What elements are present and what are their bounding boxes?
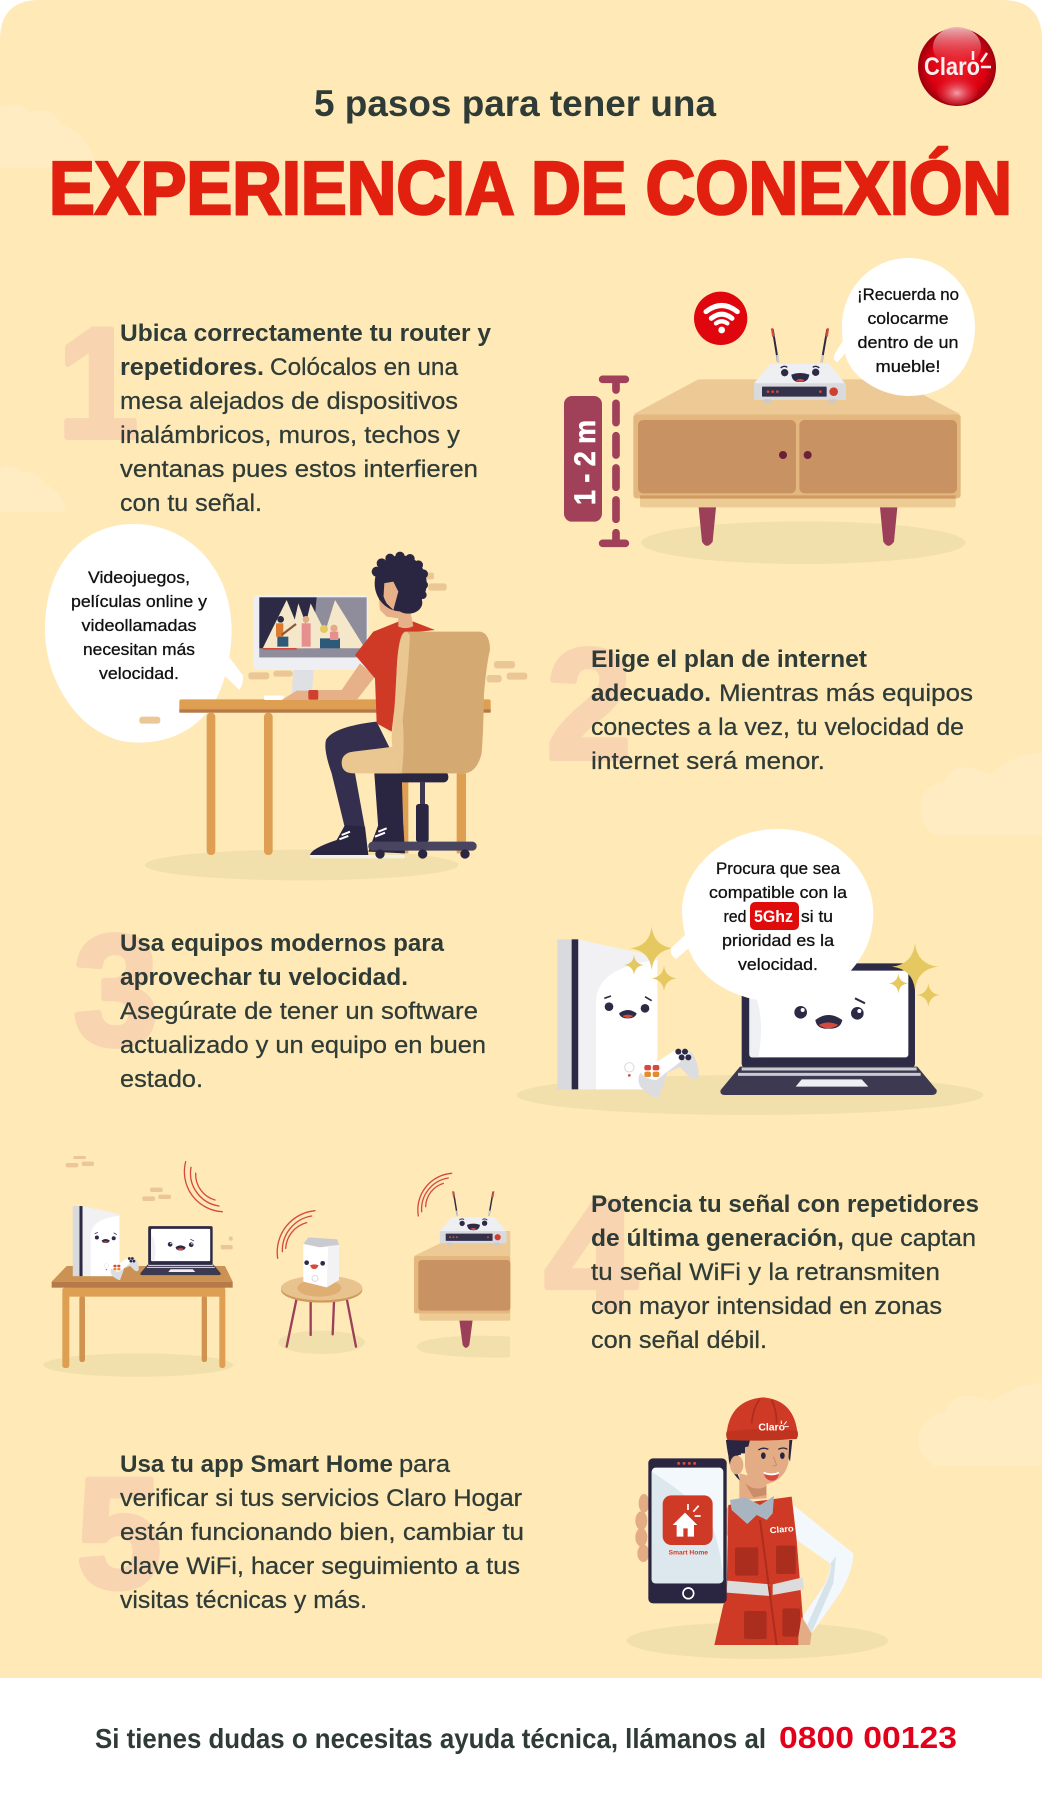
illustration: repeater placement — [43, 1156, 510, 1377]
step 1 body: Ubica correctamente tu router y — [120, 320, 492, 347]
cabinet partial — [414, 1231, 510, 1348]
floor shadow — [627, 1622, 888, 1659]
callout text: uses: películas online y — [71, 592, 208, 611]
step 2 body: Mientras más equipos — [719, 680, 973, 707]
step 5 body: para — [399, 1451, 451, 1478]
cloud: top left — [0, 104, 96, 168]
table — [52, 1266, 233, 1368]
callout text: router: colocarme — [868, 309, 948, 328]
speech bubble: router — [834, 258, 975, 396]
callout text: 5Ghz: velocidad. — [738, 955, 818, 974]
laptop mini — [140, 1226, 221, 1275]
step 2 text — [547, 618, 973, 792]
step 3 body: estado. — [120, 1066, 203, 1093]
number 2: 2 — [547, 618, 631, 792]
step 4 body — [591, 1191, 979, 1354]
console — [557, 939, 699, 1098]
repeater — [303, 1237, 339, 1287]
callout text: 5Ghz: compatible con la — [709, 883, 848, 902]
step 3 body — [120, 930, 486, 1093]
step 1 body: mesa alejados de dispositivos — [120, 388, 458, 415]
callout text: 5Ghz: red — [724, 907, 746, 926]
router mini — [440, 1191, 507, 1245]
badge: 5Ghz: 5Ghz — [754, 907, 793, 926]
phone number: 0800 00123 — [779, 1720, 957, 1755]
callout text: 5Ghz — [709, 859, 848, 974]
icon: Smart Home app — [663, 1495, 713, 1556]
step 5 body: están funcionando bien, cambiar tu — [120, 1519, 524, 1546]
speech bubble: 5Ghz — [671, 829, 873, 1002]
cloud: mid right — [921, 752, 1042, 835]
step 2 body: Elige el plan de internet — [591, 646, 867, 673]
step 1 text — [58, 297, 492, 517]
sparkles — [624, 927, 940, 1007]
floor shadow — [145, 850, 458, 880]
callout text: router: ¡Recuerda no — [857, 285, 959, 304]
step 3 body: Asegúrate de tener un software — [120, 998, 478, 1025]
number 1: 1 — [58, 297, 138, 471]
measure label: 1 - 2 m — [569, 420, 602, 505]
step 5 body: Usa tu app Smart Home — [120, 1451, 393, 1478]
footer text: Si tienes dudas o necesitas ayuda técnica, llámanos al — [95, 1723, 766, 1754]
icon: wifi badge — [694, 292, 747, 345]
illustration: technician with phone — [627, 1397, 888, 1659]
callout text: router: dentro de un — [858, 333, 958, 352]
callout text: uses — [71, 568, 208, 683]
step 1 body: inalámbricos, muros, techos y — [120, 422, 460, 449]
step 5 body: clave WiFi, hacer seguimiento a tus — [120, 1553, 520, 1580]
chair — [342, 632, 490, 859]
callout text: router — [857, 285, 959, 376]
number 5: 5 — [77, 1447, 161, 1621]
step 4 body: con mayor intensidad en zonas — [591, 1293, 942, 1320]
step 5 text — [77, 1447, 524, 1621]
callout text: router: mueble! — [876, 357, 940, 376]
hat logo: Claro — [758, 1422, 785, 1433]
icon: Smart Home app: Smart Home — [669, 1549, 709, 1556]
number 3: 3 — [74, 904, 158, 1078]
step 4 text — [545, 1169, 979, 1354]
step 5 body: visitas técnicas y más. — [120, 1587, 367, 1614]
cloud: lower right — [918, 1383, 1042, 1466]
step 3 body: Usa equipos modernos para — [120, 930, 445, 957]
callout text: 5Ghz: prioridad es la — [722, 931, 835, 950]
step 3 body: actualizado y un equipo en buen — [120, 1032, 486, 1059]
worker — [714, 1397, 853, 1645]
console mini — [73, 1206, 139, 1280]
step 4 body: de última generación, — [591, 1225, 844, 1252]
person — [282, 552, 435, 858]
callout text: uses: velocidad. — [99, 664, 179, 683]
illustration: person at desk — [45, 524, 527, 880]
step 5 body — [120, 1451, 524, 1614]
step 2 body: adecuado. — [591, 680, 711, 707]
floor shadow — [641, 521, 965, 564]
callout text: uses: Videojuegos, — [88, 568, 190, 587]
callout text: 5Ghz: si tu — [801, 907, 833, 926]
hand — [635, 1494, 812, 1645]
height measure — [564, 379, 625, 543]
step 1 body: Colócalos en una — [270, 354, 459, 381]
cabinet — [633, 379, 961, 546]
illustration: console and laptop — [517, 829, 983, 1115]
callout text: 5Ghz: Procura que sea — [716, 859, 841, 878]
title: subheading: 5 pasos para tener una — [314, 83, 716, 124]
signal waves: router — [418, 1173, 452, 1216]
step 4 body: Potencia tu señal con repetidores — [591, 1191, 979, 1218]
desk — [179, 695, 491, 855]
stool — [281, 1276, 362, 1347]
step 2 body — [591, 646, 973, 775]
step 2 body: internet será menor. — [591, 748, 825, 775]
step 4 body: tu señal WiFi y la retransmiten — [591, 1259, 940, 1286]
step 5 body: verificar si tus servicios Claro Hogar — [120, 1485, 522, 1512]
step 4 body: que captan — [851, 1225, 976, 1252]
logo: Claro: Claro — [924, 53, 980, 81]
phone — [648, 1458, 727, 1603]
floor shadow — [517, 1075, 983, 1115]
floor shadows — [43, 1331, 510, 1377]
footer band — [0, 1678, 1042, 1793]
callout text: uses: videollamadas — [82, 616, 196, 635]
step 1 body: ventanas pues estos interfieren — [120, 456, 478, 483]
step 1 body: repetidores. — [120, 354, 264, 381]
step 1 body — [120, 320, 492, 517]
decorative dashes — [139, 573, 527, 724]
laptop — [720, 963, 937, 1095]
step 2 body: conectes a la vez, tu velocidad de — [591, 714, 964, 741]
step 1 body: con tu señal. — [120, 490, 262, 517]
speech bubble: uses — [45, 524, 243, 743]
logo: Claro — [918, 27, 996, 106]
vest logo: Claro — [769, 1523, 794, 1535]
signal waves: repeater — [277, 1211, 315, 1258]
decorative dashes — [66, 1156, 233, 1249]
illustration: router on cabinet — [564, 258, 975, 564]
router — [754, 328, 846, 403]
step 3 text — [74, 904, 486, 1093]
number 4: 4 — [545, 1169, 637, 1343]
monitor — [253, 595, 368, 697]
step 4 body: con señal débil. — [591, 1327, 767, 1354]
signal waves: table — [184, 1162, 222, 1212]
cloud: mid left — [0, 466, 66, 512]
callout text: uses: necesitan más — [83, 640, 195, 659]
step 3 body: aprovechar tu velocidad. — [120, 964, 408, 991]
